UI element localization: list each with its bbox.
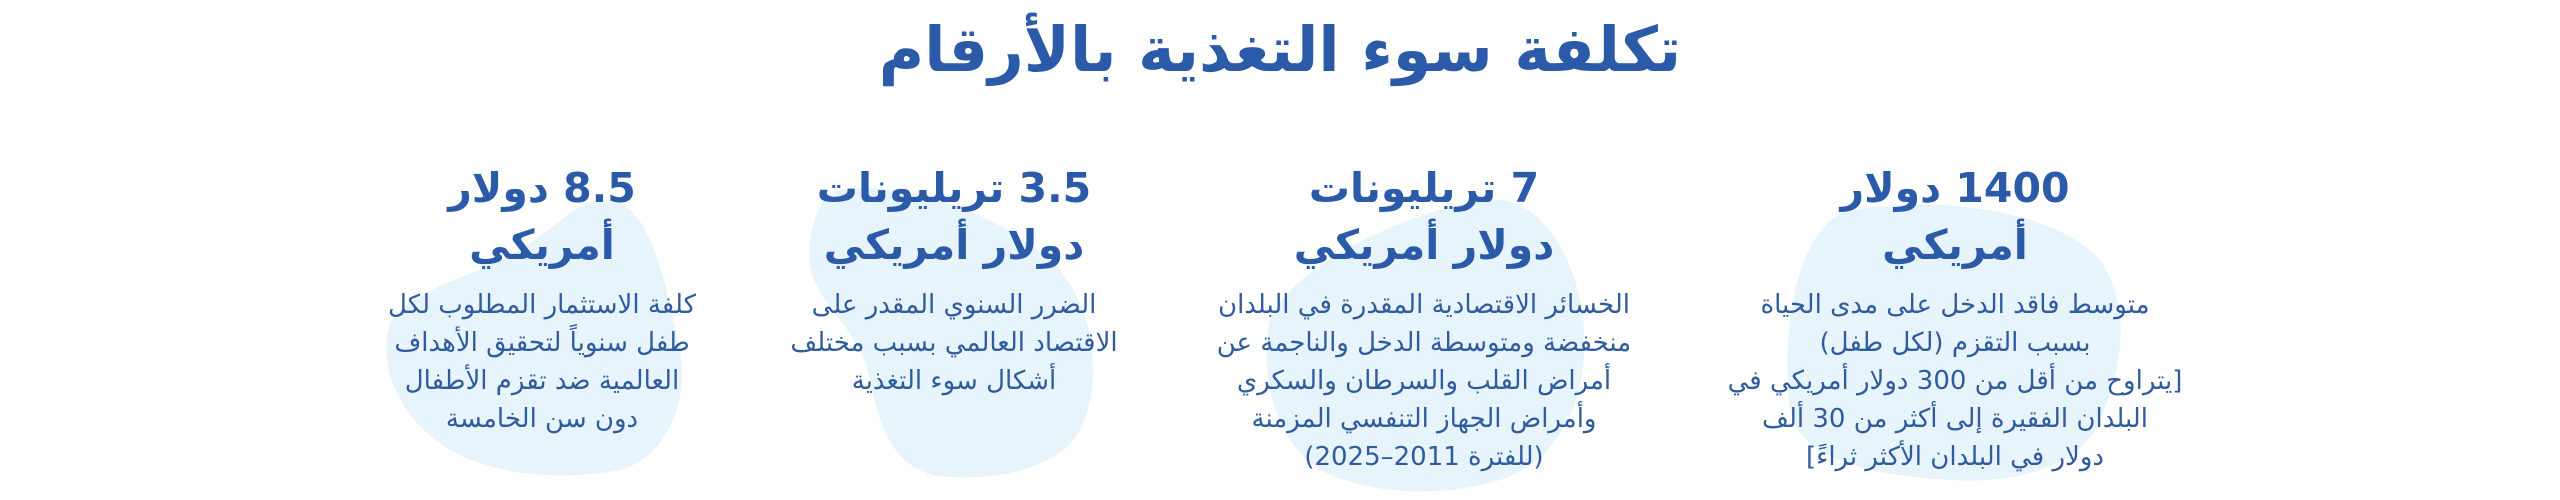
panel: 1400 dollars <box>1728 164 2182 472</box>
panel: 3.5 trillion <box>790 164 1118 396</box>
text: lifetime income loss <box>1728 290 2182 472</box>
heading: 8.5 dollars <box>446 164 636 269</box>
text: annual global damage: الاقتصاد العالمي بسبب مختلف <box>790 328 1118 358</box>
panel: 7 trillion <box>1217 164 1631 472</box>
heading: 1400 dollars: 1400 دولار <box>1840 164 2070 212</box>
text: economic losses: (للفترة 2011–2025) <box>1304 442 1544 472</box>
text: lifetime income loss: متوسط فاقد الدخل على مدى الحياة <box>1760 290 2150 320</box>
heading: 7 trillion: 7 تريليونات <box>1309 164 1539 212</box>
text: investment per child <box>388 290 696 434</box>
text: lifetime income loss: بسبب التقزم (لكل طفل) <box>1820 328 2090 358</box>
text: investment per child: كلفة الاستثمار المطلوب لكل <box>388 290 696 320</box>
text: lifetime income loss: دولار في البلدان الأكثر ثراءً] <box>1806 442 2104 472</box>
text: economic losses <box>1217 290 1631 472</box>
heading: 3.5 trillion: دولار أمريكي <box>824 221 1084 269</box>
text: annual global damage <box>790 290 1118 396</box>
text: economic losses: الخسائر الاقتصادية المقدرة في البلدان <box>1218 290 1630 320</box>
text: annual global damage: الضرر السنوي المقدر على <box>812 290 1096 320</box>
title: تكلفة سوء التغذية بالأرقام <box>879 13 1681 86</box>
heading: 1400 dollars: أمريكي <box>1882 221 2028 269</box>
text: lifetime income loss: البلدان الفقيرة إلى أكثر من 30 ألف <box>1762 404 2148 434</box>
text: investment per child: العالمية ضد تقزم الأطفال <box>405 366 679 396</box>
text: economic losses: وأمراض الجهاز التنفسي المزمنة <box>1252 404 1596 434</box>
heading: 1400 dollars <box>1838 164 2070 269</box>
text: lifetime income loss: [يتراوح من أقل من 300 دولار أمريكي في <box>1728 366 2182 396</box>
text: economic losses: منخفضة ومتوسطة الدخل والناجمة عن <box>1217 328 1631 358</box>
heading: 3.5 trillion <box>817 164 1091 269</box>
heading: 8.5 dollars: 8.5 دولار <box>448 164 636 212</box>
heading: 7 trillion: دولار أمريكي <box>1294 221 1554 269</box>
heading: 7 trillion <box>1294 164 1554 269</box>
panel: 8.5 dollars <box>388 164 696 434</box>
text: investment per child: دون سن الخامسة <box>446 404 638 434</box>
text: economic losses: أمراض القلب والسرطان والسكري <box>1237 366 1611 396</box>
text: annual global damage: أشكال سوء التغذية <box>852 366 1056 396</box>
heading: 8.5 dollars: أمريكي <box>469 221 615 269</box>
text: investment per child: طفل سنوياً لتحقيق الأهداف <box>394 328 690 358</box>
heading: 3.5 trillion: 3.5 تريليونات <box>817 164 1091 212</box>
